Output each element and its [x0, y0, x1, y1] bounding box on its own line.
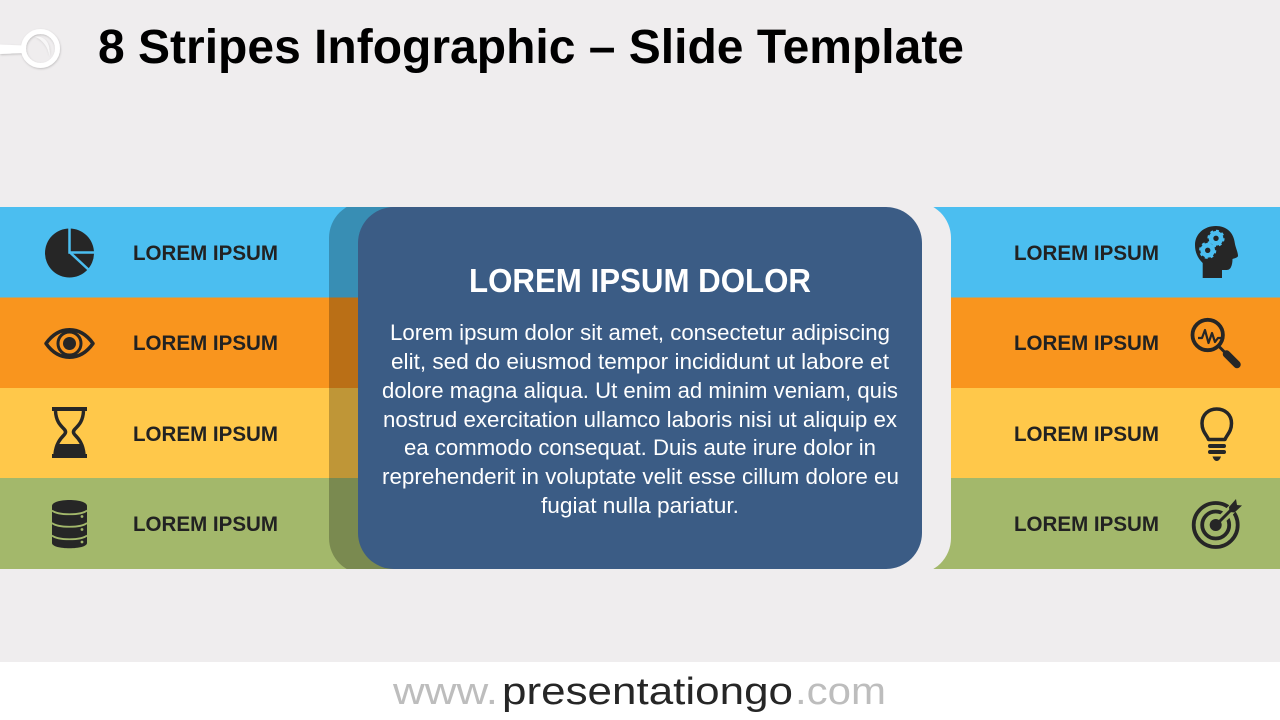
footer website text	[392, 671, 886, 713]
panel: central card	[358, 207, 922, 569]
footer website text: www.	[392, 671, 498, 713]
left labels	[133, 241, 278, 536]
footer website text: .com	[795, 671, 886, 713]
left labels: LOREM IPSUM	[133, 331, 278, 355]
card body text: fugiat nulla pariatur.	[541, 493, 739, 518]
stripes	[0, 207, 1280, 569]
icon: light bulb	[1202, 409, 1232, 461]
right labels: LOREM IPSUM	[1014, 512, 1159, 536]
title: 8 Stripes Infographic – Slide Template	[98, 20, 964, 74]
footer website text: presentationgo	[502, 671, 793, 713]
icon: eye	[46, 330, 93, 357]
right labels	[1014, 241, 1159, 536]
icon: hourglass	[52, 407, 87, 458]
card body text: elit, sed do eiusmod tempor incididunt ut labore et	[391, 349, 889, 374]
logo: white ring with tail	[0, 32, 58, 66]
card heading: LOREM IPSUM DOLOR	[469, 262, 811, 299]
gear upper	[1208, 231, 1224, 246]
left labels: LOREM IPSUM	[133, 241, 278, 265]
right labels: LOREM IPSUM	[1014, 241, 1159, 265]
card body text: dolore magna aliqua. Ut enim ad minim veniam, quis	[382, 378, 898, 403]
card body text: ea commodo consequat. Duis aute irure dolor in	[404, 435, 876, 460]
left labels: LOREM IPSUM	[133, 422, 278, 446]
gear lower	[1200, 243, 1215, 258]
card body text: Lorem ipsum dolor sit amet, consectetur adipiscing	[390, 320, 890, 345]
left translucent band	[329, 207, 392, 569]
icon: magnifier with pulse	[1192, 320, 1237, 364]
right labels: LOREM IPSUM	[1014, 422, 1159, 446]
icon: pie chart	[45, 227, 95, 278]
icon: database	[52, 500, 87, 548]
card body text	[382, 320, 899, 518]
left labels: LOREM IPSUM	[133, 512, 278, 536]
right labels: LOREM IPSUM	[1014, 331, 1159, 355]
icon: head with gears	[1195, 226, 1238, 278]
card body text: reprehenderit in voluptate velit esse cillum dolore eu	[382, 464, 899, 489]
footer bar	[0, 662, 1280, 720]
card body text: nostrud exercitation ullamco laboris nisi ut aliquip ex	[383, 407, 897, 432]
right background band	[886, 207, 951, 569]
icon: target with arrow	[1194, 499, 1242, 547]
